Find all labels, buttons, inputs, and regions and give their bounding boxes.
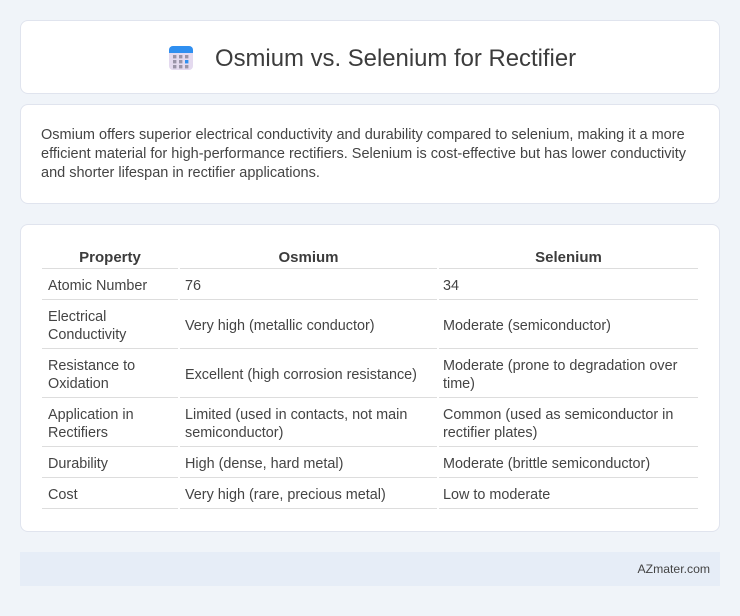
comparison table: Oxidation [48,376,109,392]
comparison table: Resistance to [48,358,135,374]
intro text: and shorter lifespan in rectifier applications. [41,165,320,181]
intro text [41,127,686,181]
comparison table: Moderate (prone to degradation over [443,358,677,374]
comparison table: Very high (metallic conductor) [185,318,375,334]
footer: AZmater.com [638,562,710,576]
icon: calendar [169,46,193,70]
comparison table: Cost [48,487,78,503]
comparison table: time) [443,376,475,392]
comparison table: Selenium [535,249,602,266]
intro text: Osmium offers superior electrical conductivity and durability compared to selenium, making it a more [41,127,685,143]
comparison table: 76 [185,278,201,294]
title card [20,20,720,94]
comparison table: 34 [443,278,459,294]
comparison table: Conductivity [48,327,126,343]
title: Osmium vs. Selenium for Rectifier [215,45,576,72]
intro card [20,104,720,204]
comparison table: Rectifiers [48,425,108,441]
table card [20,224,720,532]
comparison table: Moderate (semiconductor) [443,318,611,334]
comparison table: High (dense, hard metal) [185,456,343,472]
comparison table: Low to moderate [443,487,550,503]
comparison table: semiconductor) [185,425,283,441]
comparison table: Electrical [48,309,106,325]
comparison table: Atomic Number [48,278,147,294]
comparison table: Durability [48,456,108,472]
footer [20,552,720,586]
intro text: efficient material for high-performance rectifiers. Selenium is cost-effective but has lower conductivity [41,146,686,162]
comparison table: Common (used as semiconductor in [443,407,673,423]
comparison table: Property [79,249,141,266]
comparison table: Osmium [278,249,338,266]
comparison table: Application in [48,407,134,423]
comparison table: Moderate (brittle semiconductor) [443,456,650,472]
comparison table: Very high (rare, precious metal) [185,487,386,503]
comparison table: Limited (used in contacts, not main [185,407,407,423]
comparison table: rectifier plates) [443,425,537,441]
comparison table: Excellent (high corrosion resistance) [185,367,417,383]
